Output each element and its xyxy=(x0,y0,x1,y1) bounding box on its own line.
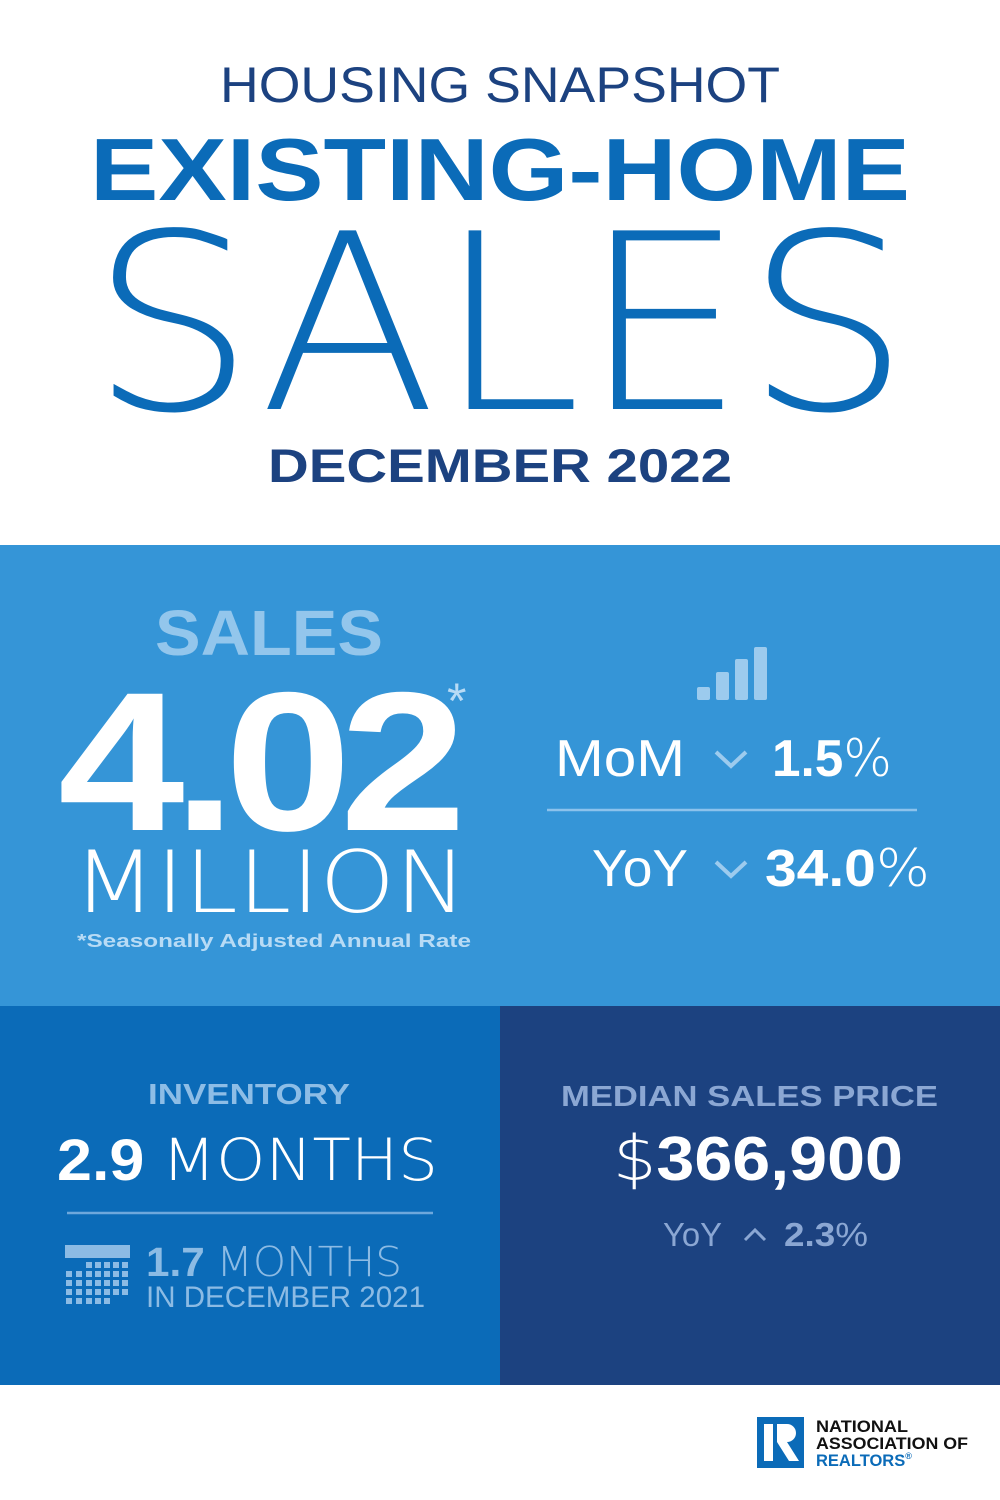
title block xyxy=(90,57,910,492)
logo: NAR xyxy=(757,1417,968,1470)
MoM stat xyxy=(555,729,892,789)
footnote: *Seasonally Adjusted Annual Rate xyxy=(77,931,471,951)
asterisk: * xyxy=(447,673,466,729)
panel: sales xyxy=(0,545,1000,1006)
logo: NAR: NATIONAL xyxy=(816,1418,908,1436)
median label: MEDIAN SALES PRICE xyxy=(561,1081,938,1113)
YoY stat: YoY xyxy=(592,840,688,898)
logo: NAR: ® xyxy=(905,1451,912,1461)
YoY stat xyxy=(592,839,930,899)
price YoY: YoY xyxy=(663,1216,722,1253)
YoY stat: 34.0% xyxy=(765,839,930,899)
heading: sales: SALES xyxy=(90,182,910,467)
price YoY xyxy=(663,1216,868,1253)
price value: $366,900 xyxy=(613,1122,903,1195)
date: DECEMBER 2022 xyxy=(268,439,732,492)
prior year inventory xyxy=(146,1238,425,1314)
inventory label: INVENTORY xyxy=(148,1079,350,1111)
icon: bar chart xyxy=(697,647,767,700)
subtitle: housing snapshot: HOUSING SNAPSHOT xyxy=(220,57,780,113)
heading: existing-home: EXISTING-HOME xyxy=(90,120,910,219)
big number: 4.02 xyxy=(58,651,458,872)
logo: NAR: ASSOCIATION OF xyxy=(816,1435,968,1453)
million: MILLION xyxy=(73,833,467,933)
price YoY: 2.3% xyxy=(784,1216,868,1253)
panel: median sales price xyxy=(500,1006,1000,1385)
sales label: SALES xyxy=(155,597,383,669)
prior year inventory: IN DECEMBER 2021 xyxy=(146,1281,425,1314)
MoM stat: 1.5% xyxy=(772,729,892,789)
inventory value: 2.9 MONTHS xyxy=(57,1126,438,1194)
icon: calendar xyxy=(65,1245,130,1304)
MoM stat: MoM xyxy=(555,730,685,788)
logo: NAR: REALTORS xyxy=(816,1452,905,1470)
prior year inventory: 1.7 MONTHS xyxy=(146,1238,402,1286)
panel: inventory xyxy=(0,1006,500,1385)
